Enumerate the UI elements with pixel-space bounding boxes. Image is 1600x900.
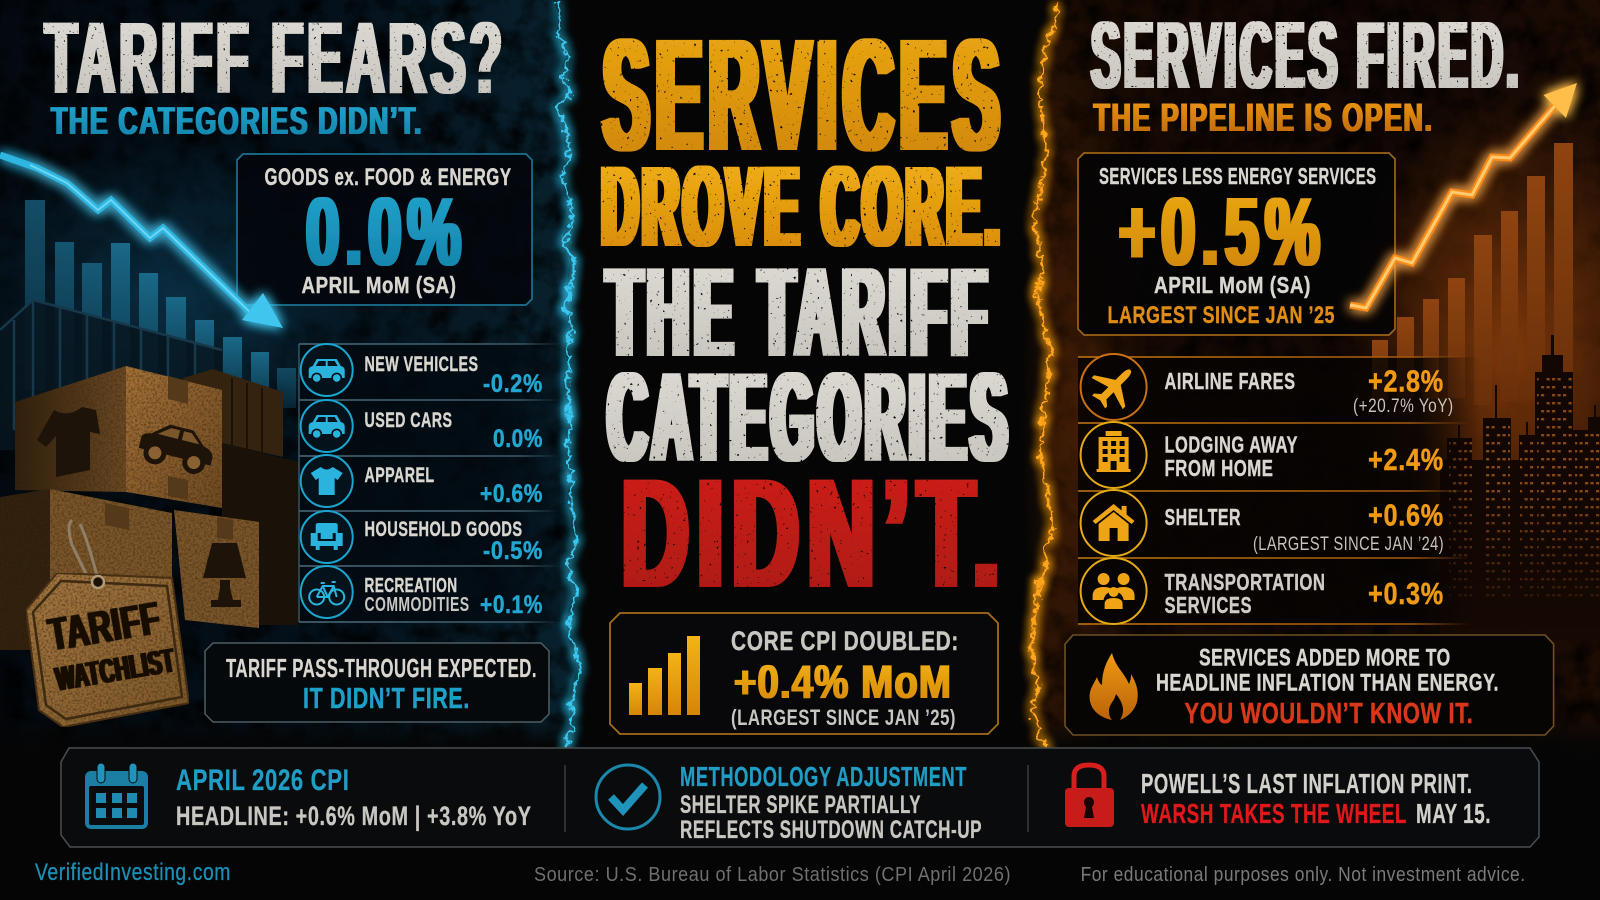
stacked cardboard boxes bbox=[0, 366, 298, 650]
icon: lamp on box bbox=[203, 543, 246, 607]
april cpi text: HEADLINE: +0.6% MoM | +3.8% YoY bbox=[176, 801, 532, 831]
left subheading: THE CATEGORIES DIDN’T. bbox=[51, 100, 423, 143]
row: lodging away from home: FROM HOME bbox=[1164, 455, 1274, 481]
row: apparel: +0.6% bbox=[480, 480, 543, 508]
headline: didn't: DIDN’T. bbox=[622, 447, 1008, 621]
row: household goods bbox=[301, 511, 543, 565]
core cpi box bbox=[610, 613, 998, 734]
row: recreation commodities: RECREATION bbox=[364, 575, 458, 597]
goods stat box: APRIL MoM (SA) bbox=[302, 272, 456, 298]
services stat box: LARGEST SINCE JAN ’25 bbox=[1108, 302, 1335, 329]
callout: services vs energy: SERVICES ADDED MORE TO bbox=[1199, 645, 1451, 672]
row: transportation services bbox=[1081, 558, 1444, 624]
row: recreation commodities bbox=[301, 566, 543, 619]
shipping container bbox=[0, 300, 222, 450]
callout: tariff pass-through: TARIFF PASS-THROUGH EXPECTED. bbox=[226, 653, 537, 683]
row: lodging away from home: +2.4% bbox=[1368, 442, 1444, 477]
methodology text: METHODOLOGY ADJUSTMENT bbox=[680, 761, 967, 792]
right subheading: THE PIPELINE IS OPEN. bbox=[1094, 96, 1434, 140]
core cpi box: CORE CPI DOUBLED: bbox=[731, 626, 959, 656]
blue lightning edge bbox=[553, 0, 576, 752]
row: transportation services: SERVICES bbox=[1164, 592, 1252, 618]
services stat box: SERVICES LESS ENERGY SERVICES bbox=[1099, 163, 1376, 189]
row: used cars: USED CARS bbox=[364, 409, 452, 432]
services stat box: +0.5% bbox=[1119, 177, 1326, 286]
left panel: tariff fears: DROVE CORE. bbox=[602, 143, 1004, 271]
footer: For educational purposes only. Not investment advice. bbox=[1081, 864, 1526, 886]
row: shelter bbox=[1081, 490, 1444, 556]
goods stat box: GOODS ex. FOOD & ENERGY bbox=[264, 164, 512, 191]
services stat box: APRIL MoM (SA) bbox=[1154, 272, 1311, 298]
row: transportation services: TRANSPORTATION bbox=[1164, 569, 1326, 595]
methodology text bbox=[680, 761, 982, 844]
row: airline fares: AIRLINE FARES bbox=[1164, 368, 1296, 394]
row: new vehicles bbox=[301, 344, 543, 398]
icon: t-shirt on box bbox=[37, 407, 100, 477]
goods stat box: 0.0% bbox=[306, 177, 467, 286]
icon: calendar bbox=[85, 763, 148, 829]
row: household goods: -0.5% bbox=[483, 537, 543, 565]
center panel: main headline bbox=[602, 5, 1012, 734]
goods category rows bbox=[299, 344, 560, 622]
row: apparel bbox=[301, 455, 543, 508]
powell text: WARSH TAKES THE WHEEL bbox=[1141, 798, 1407, 829]
row: used cars bbox=[301, 400, 543, 453]
core cpi box: +0.4% MoM bbox=[734, 655, 952, 708]
row: recreation commodities: +0.1% bbox=[480, 591, 543, 619]
row: airline fares bbox=[1081, 354, 1454, 420]
april cpi text: APRIL 2026 CPI bbox=[176, 764, 350, 797]
rising orange arrow bbox=[1350, 83, 1577, 308]
row: recreation commodities: COMMODITIES bbox=[364, 594, 470, 616]
orange lightning edge bbox=[1027, 0, 1057, 752]
methodology text: SHELTER SPIKE PARTIALLY bbox=[680, 791, 921, 819]
orange bar chart backdrop bbox=[1372, 143, 1573, 405]
methodology text: REFLECTS SHUTDOWN CATCH-UP bbox=[680, 816, 982, 844]
callout: tariff pass-through: IT DIDN’T FIRE. bbox=[303, 683, 470, 715]
icon: check mark bbox=[596, 765, 660, 829]
falling blue arrow bbox=[0, 155, 283, 328]
left panel: tariff fears: SERVICES bbox=[603, 5, 1006, 184]
icon: rising bars bbox=[629, 636, 700, 715]
goods stat box bbox=[237, 154, 532, 305]
left heading: TARIFF FEARS? bbox=[45, 1, 506, 115]
powell text: MAY 15. bbox=[1416, 798, 1491, 829]
blue bar chart backdrop bbox=[25, 200, 296, 408]
row: shelter: (LARGEST SINCE JAN ’24) bbox=[1253, 534, 1444, 555]
core cpi box: (LARGEST SINCE JAN ’25) bbox=[731, 705, 956, 730]
icon: flame bbox=[1090, 653, 1138, 720]
footer: VerifiedInvesting.com bbox=[35, 859, 231, 886]
left panel: tariff fears: THE TARIFF bbox=[607, 241, 992, 383]
icon: padlock bbox=[1065, 765, 1114, 827]
row: used cars: 0.0% bbox=[493, 425, 543, 453]
city skyline bbox=[1440, 335, 1600, 640]
powell text bbox=[1141, 768, 1491, 829]
row: lodging away from home: LODGING AWAY bbox=[1164, 432, 1298, 458]
icon: car on box bbox=[136, 419, 218, 475]
callout: tariff pass-through bbox=[205, 643, 549, 722]
row: new vehicles: -0.2% bbox=[483, 370, 543, 398]
services stat box bbox=[1078, 153, 1395, 335]
footer bbox=[35, 859, 1526, 886]
tariff watchlist tag: TARIFF bbox=[45, 591, 164, 661]
april cpi text bbox=[176, 764, 532, 831]
footer: Source: U.S. Bureau of Labor Statistics (CPI April 2026) bbox=[534, 864, 1011, 886]
right panel: services fired bbox=[1065, 2, 1600, 735]
row: airline fares: +2.8% bbox=[1368, 364, 1444, 399]
row: airline fares: (+20.7% YoY) bbox=[1353, 396, 1454, 417]
services category rows bbox=[1078, 354, 1480, 624]
tariff watchlist tag bbox=[26, 520, 189, 727]
bottom info bar bbox=[61, 748, 1539, 847]
row: transportation services: +0.3% bbox=[1368, 576, 1444, 611]
row: new vehicles: NEW VEHICLES bbox=[364, 353, 478, 376]
row: household goods: HOUSEHOLD GOODS bbox=[364, 518, 522, 541]
row: apparel: APPAREL bbox=[364, 464, 434, 487]
row: lodging away from home bbox=[1081, 422, 1444, 488]
row: shelter: SHELTER bbox=[1164, 504, 1241, 530]
row: shelter: +0.6% bbox=[1368, 498, 1444, 533]
left panel: tariff fears: CATEGORIES bbox=[608, 346, 1012, 488]
tariff watchlist tag: WATCHLIST bbox=[53, 642, 178, 699]
callout: services vs energy bbox=[1065, 635, 1554, 735]
callout: services vs energy: YOU WOULDN’T KNOW IT. bbox=[1184, 698, 1474, 730]
